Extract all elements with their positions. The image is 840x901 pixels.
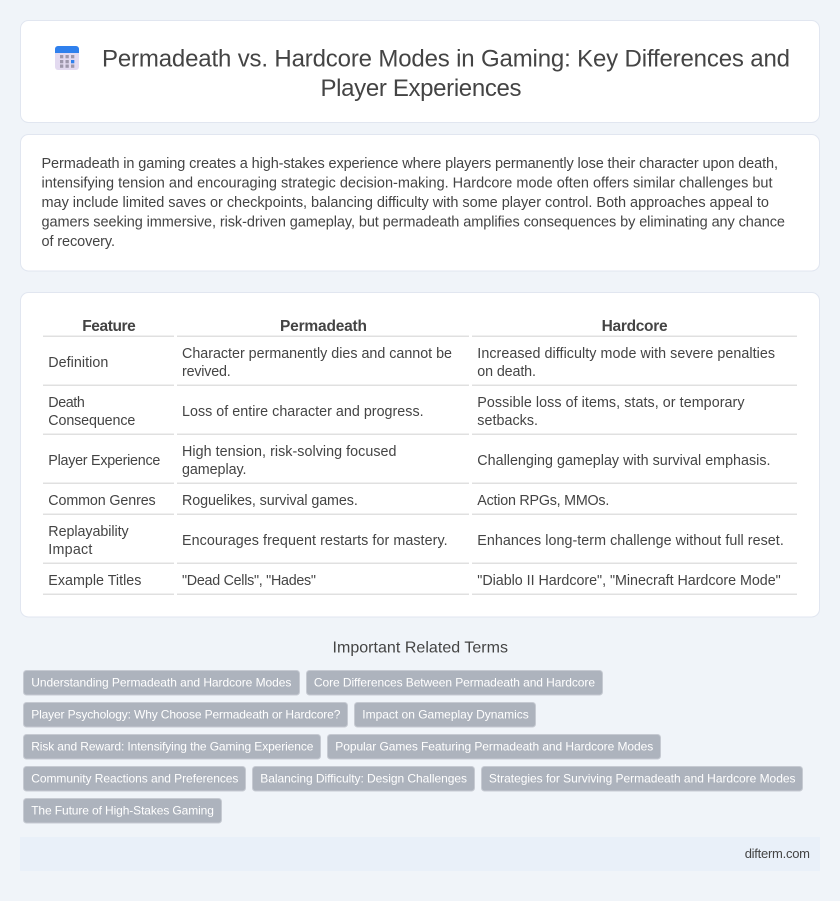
row: death consequence: setbacks.: [477, 413, 538, 429]
tag: community reactions: [24, 766, 246, 791]
row: replayability impact: Enhances long-term challenge without full reset.: [477, 533, 784, 549]
row: definition: [48, 346, 775, 380]
term tags: [24, 670, 802, 823]
title: Permadeath vs. Hardcore Modes in Gaming: Key Differences and: [102, 46, 790, 72]
table header: Feature: [82, 318, 136, 335]
title: [102, 46, 790, 102]
row: example titles: Example Titles: [48, 573, 141, 589]
title: Player Experiences: [320, 75, 522, 102]
tag: understanding: Understanding Permadeath and Hardcore Modes: [31, 676, 291, 690]
tag: balancing difficulty: Balancing Difficulty: Design Challenges: [260, 772, 467, 786]
row: player experience: High tension, risk-solving focused: [182, 444, 397, 460]
tag: future: [24, 798, 222, 823]
intro text: Permadeath in gaming creates a high-stakes experience where players permanently lose their character upon death,: [42, 156, 778, 172]
row: example titles: [48, 573, 781, 589]
tag: popular games: Popular Games Featuring Permadeath and Hardcore Modes: [335, 740, 653, 754]
tag: risk and reward: [24, 734, 320, 759]
tag: gameplay dynamics: Impact on Gameplay Dynamics: [362, 708, 529, 722]
tag: core differences: [306, 670, 602, 695]
tag: player psychology: Player Psychology: Why Choose Permadeath or Hardcore?: [31, 708, 341, 722]
intro text: may include limited saves or checkpoints, balancing difficulty with some player control. Both approaches appeal to: [42, 195, 769, 211]
panel: title card: [20, 20, 820, 122]
footer text: difterm.com: [745, 846, 810, 861]
row: definition: Character permanently dies and cannot be: [182, 346, 452, 362]
heading: important related terms: Important Related Terms: [332, 640, 508, 656]
row: death consequence: Consequence: [48, 413, 135, 429]
tag: strategies: Strategies for Surviving Permadeath and Hardcore Modes: [489, 772, 796, 786]
icon: calendar: [55, 46, 79, 70]
row: replayability impact: Encourages frequent restarts for mastery.: [182, 533, 448, 549]
row: replayability impact: Replayability: [48, 524, 130, 540]
row: common genres: Action RPGs, MMOs.: [477, 493, 609, 509]
row: player experience: gameplay.: [182, 462, 246, 478]
table header: Hardcore: [602, 318, 668, 335]
tag: gameplay dynamics: [354, 702, 536, 727]
tag: balancing difficulty: [252, 766, 474, 791]
tag: strategies: [482, 766, 802, 791]
row: death consequence: Loss of entire character and progress.: [182, 404, 424, 420]
intro text: of recovery.: [42, 234, 115, 250]
tag: risk and reward: Risk and Reward: Intensifying the Gaming Experience: [31, 740, 314, 754]
row: player experience: Player Experience: [48, 453, 160, 469]
row: example titles: "Dead Cells", "Hades": [182, 573, 316, 589]
tag: understanding: [24, 670, 300, 695]
tag: player psychology: [24, 702, 348, 727]
footer bar: [20, 837, 820, 871]
row: definition: revived.: [182, 364, 231, 380]
tag: core differences: Core Differences Between Permadeath and Hardcore: [314, 676, 595, 690]
row: definition: on death.: [477, 364, 536, 380]
panel: introduction: [20, 134, 820, 271]
table header: [82, 318, 668, 335]
intro text: [42, 156, 785, 250]
tag: popular games: [328, 734, 660, 759]
tag: community reactions: Community Reactions and Preferences: [31, 772, 238, 786]
row: definition: Increased difficulty mode with severe penalties: [477, 346, 775, 362]
table header: Permadeath: [280, 318, 367, 335]
intro text: intensifying tension and encouraging strategic decision-making. Hardcore mode often offers similar challenges but: [42, 176, 772, 192]
tag: future: The Future of High-Stakes Gaming: [31, 804, 214, 818]
row: example titles: "Diablo II Hardcore", "Minecraft Hardcore Mode": [477, 573, 781, 589]
row: death consequence: [48, 395, 745, 429]
row: definition: Definition: [48, 355, 108, 371]
row: player experience: [48, 444, 771, 478]
row: common genres: [48, 493, 609, 509]
row: player experience: Challenging gameplay with survival emphasis.: [477, 453, 770, 469]
row: common genres: Roguelikes, survival games.: [182, 493, 358, 509]
panel: comparison table: [20, 292, 820, 617]
row: death consequence: Possible loss of items, stats, or temporary: [477, 395, 745, 411]
intro text: gamers seeking immersive, risk-driven gameplay, but permadeath amplifies consequences by eliminating any chance: [42, 214, 785, 230]
row: common genres: Common Genres: [48, 493, 156, 509]
row: death consequence: Death: [48, 395, 85, 411]
row: replayability impact: [48, 524, 784, 558]
row: replayability impact: Impact: [48, 542, 92, 558]
